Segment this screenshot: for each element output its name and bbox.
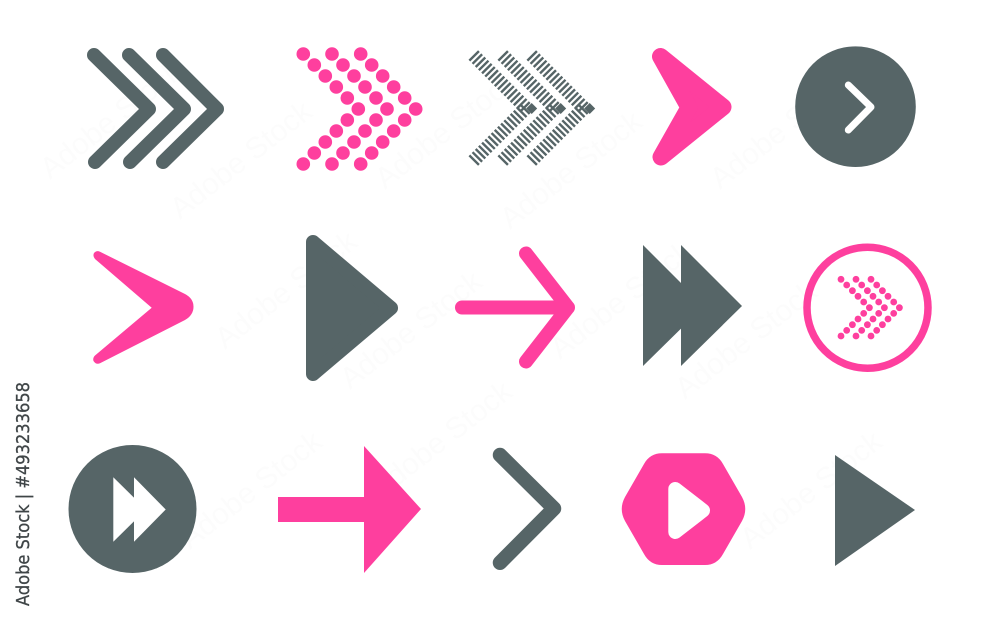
icon: gray double triangle	[643, 245, 742, 366]
icon: pink block arrow	[278, 446, 421, 573]
icon: gray triple chevron	[94, 55, 217, 162]
icon: gray circle with fast-forward	[68, 445, 196, 573]
icon: gray rounded triangle	[313, 242, 391, 374]
icon: gray circle with chevron	[795, 46, 916, 167]
icon: pink boomerang arrow	[660, 56, 723, 157]
icon: gray chevron	[500, 455, 554, 563]
icon: pink hexagon play	[622, 453, 745, 565]
icon: pink thin boomerang	[93, 251, 194, 364]
watermark text	[34, 54, 889, 556]
icon: gray striped triple chevron	[473, 55, 595, 161]
icon: pink line arrow	[462, 254, 568, 362]
icon: pink dotted triple chevron	[296, 47, 423, 171]
stock id label: Adobe Stock | #493233658	[13, 382, 34, 606]
icon: pink ring with dotted chevrons	[807, 247, 928, 368]
icon: gray triangle	[835, 455, 915, 566]
